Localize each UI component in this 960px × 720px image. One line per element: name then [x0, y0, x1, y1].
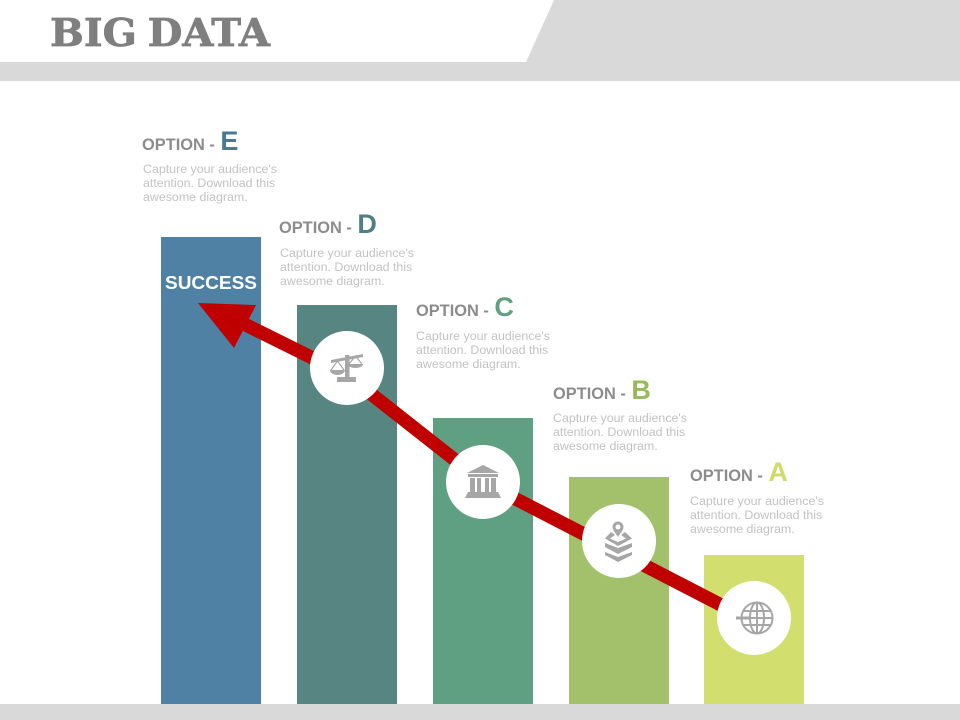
option E text: Capture your audience's	[143, 162, 277, 176]
option E text: awesome diagram.	[143, 190, 248, 204]
bar B	[569, 477, 669, 704]
option B text: attention. Download this	[553, 425, 685, 439]
header band	[0, 0, 960, 81]
icon circle: map layers	[582, 504, 656, 578]
icon circle: bank	[446, 445, 520, 519]
option C text: OPTION - C	[416, 292, 514, 322]
option A text: attention. Download this	[690, 508, 822, 522]
arrow	[198, 303, 754, 622]
option A text: OPTION - A	[690, 457, 788, 487]
success label: SUCCESS	[165, 273, 257, 293]
option D text: Capture your audience's	[280, 246, 414, 260]
option B text: Capture your audience's	[553, 411, 687, 425]
option C text: attention. Download this	[416, 343, 548, 357]
option E text	[142, 126, 277, 204]
footer band	[0, 704, 960, 720]
option B text: awesome diagram.	[553, 439, 658, 453]
option E text: attention. Download this	[143, 176, 275, 190]
option C text: Capture your audience's	[416, 329, 550, 343]
bar D	[297, 305, 397, 704]
icon circle: scales	[310, 331, 384, 405]
title: BIG DATA	[50, 10, 271, 55]
icon: globe	[736, 602, 773, 634]
option D text: OPTION - D	[279, 209, 377, 239]
option A text: Capture your audience's	[690, 494, 824, 508]
option C text	[416, 292, 550, 371]
icon: bank	[465, 465, 501, 498]
option E text: OPTION - E	[142, 126, 238, 156]
bar C	[433, 418, 533, 704]
option B text	[553, 375, 687, 453]
option D text: awesome diagram.	[280, 274, 385, 288]
option A text	[690, 457, 824, 536]
option B text: OPTION - B	[553, 375, 651, 405]
option A text: awesome diagram.	[690, 522, 795, 536]
icon: map layers	[605, 522, 632, 562]
option D text	[279, 209, 414, 288]
bar E	[161, 237, 261, 704]
bar A	[704, 555, 804, 704]
option D text: attention. Download this	[280, 260, 412, 274]
icon: scales	[330, 354, 363, 382]
icon circle: globe	[717, 581, 791, 655]
option C text: awesome diagram.	[416, 357, 521, 371]
